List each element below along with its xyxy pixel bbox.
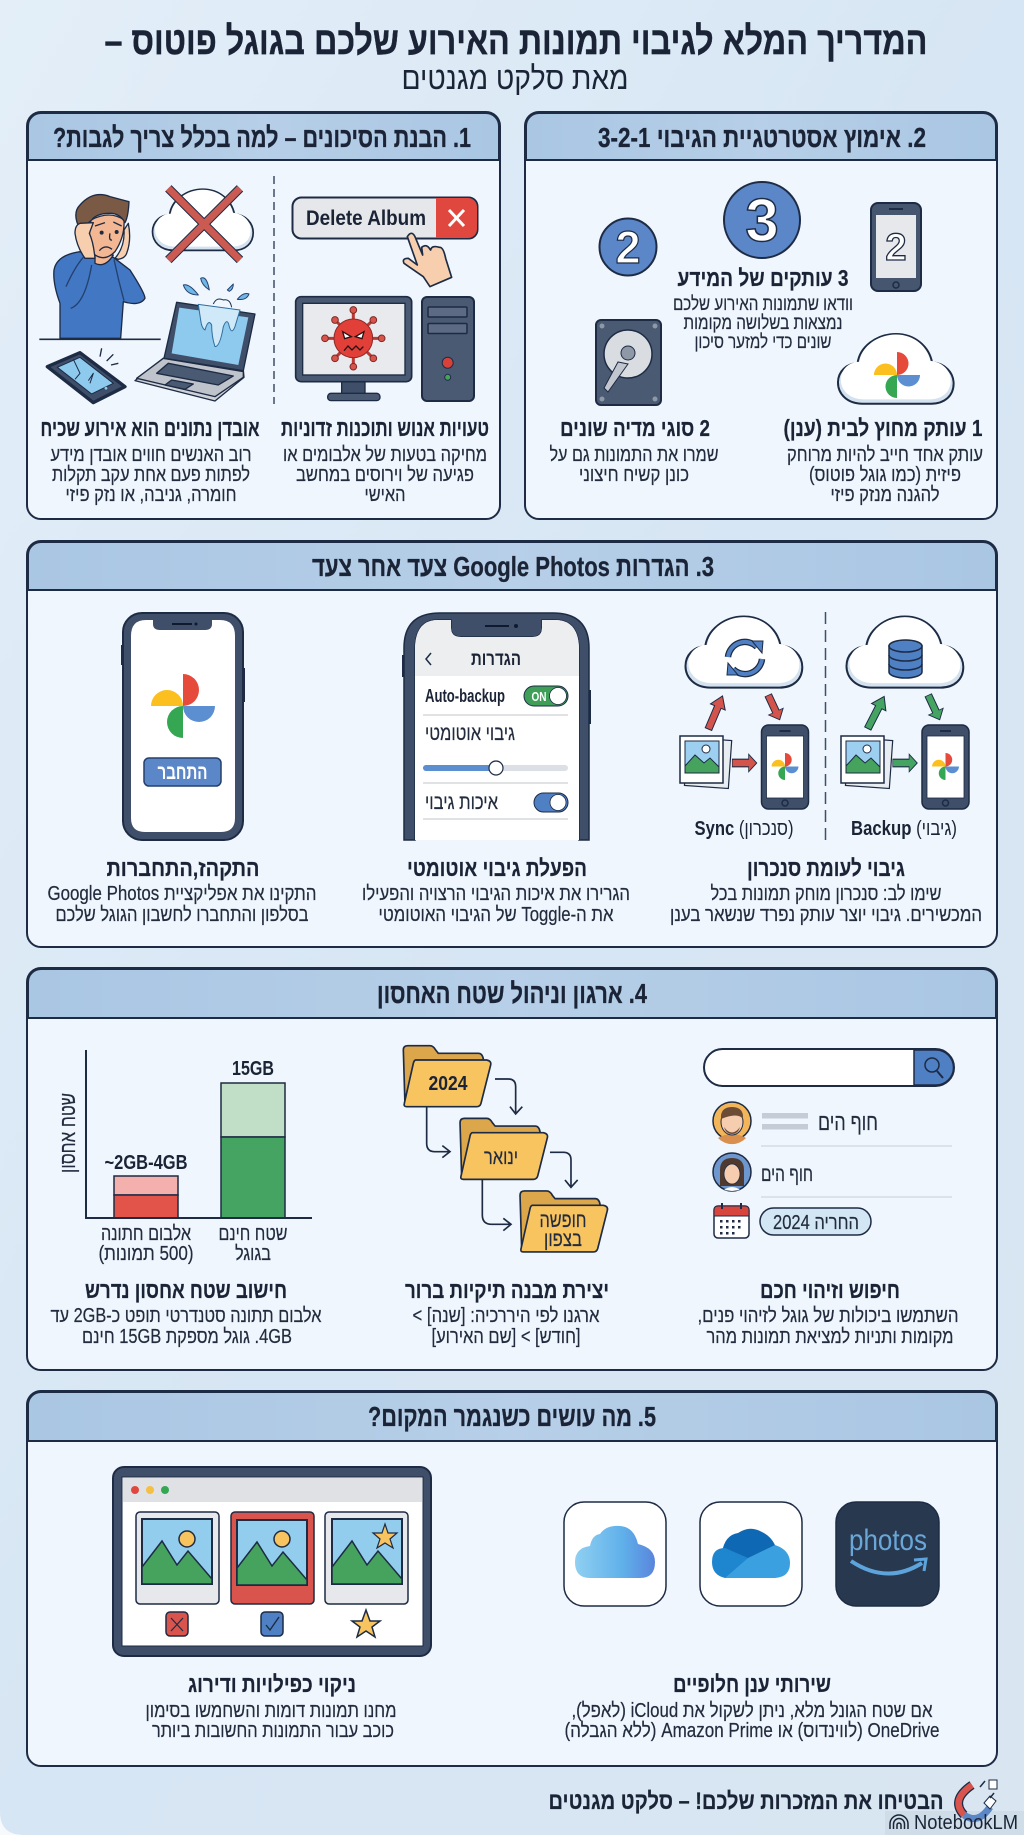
text block: folders: [חודש] > [שם האירוע] — [432, 1326, 580, 1348]
panel header band — [28, 542, 996, 590]
icon: hard drive — [596, 320, 661, 405]
icon: reject box — [166, 1612, 188, 1636]
text block: alternatives: אם שטח הגונל מלא, ניתן לשקול את iCloud (לאפל), — [572, 1700, 933, 1722]
panel header band — [526, 113, 996, 160]
text block: install: בסלפון והתחברו לחשבון הגוגל שלכם — [56, 904, 309, 926]
icon: icloud — [564, 1502, 666, 1606]
icon: pointing hand — [403, 233, 452, 287]
text block: cleanup: כוכב עבור התמונות החשובות ביותר — [152, 1720, 394, 1742]
bar: free tier — [221, 1083, 285, 1218]
icon: onedrive — [700, 1502, 802, 1606]
footer tagline: הבטיחו את המזכרות שלכם! – סלקט מגנטים — [548, 1788, 944, 1815]
heading: 2. אימוץ אסטרטגיית הגיבוי 3-2-1 — [598, 122, 926, 153]
text block: backup vs sync — [670, 855, 982, 926]
icon: wet laptop — [135, 278, 255, 401]
panel header band — [28, 969, 996, 1018]
axis label: free space: בגוגל — [235, 1243, 271, 1265]
text block: storage calc: חישוב שטח אחסון נדרש — [85, 1277, 287, 1303]
icon: backup cloud — [846, 617, 963, 688]
axis label: free space: שטח חינם — [218, 1223, 288, 1245]
text block: auto backup: הגרירו את איכות הגיבוי הרצויה והפעילו — [362, 883, 630, 905]
text block: 2 media: שמרו את התמונות גם על — [550, 444, 718, 466]
search result: woman — [713, 1153, 813, 1191]
search result: man — [713, 1102, 878, 1144]
axis label: wedding album — [98, 1223, 194, 1265]
panel card — [525, 112, 997, 519]
axis label: wedding album: אלבום חתונה — [101, 1223, 191, 1245]
text block: 2 media — [550, 415, 718, 486]
search result: man: חוף הים — [818, 1109, 878, 1135]
tag: wedding 2024: החריה 2024 — [773, 1212, 859, 1234]
text block: 1 offsite: פיזית (כמו גוגל פוטוס) — [809, 464, 961, 486]
panel: 3-2-1 strategy — [525, 112, 997, 519]
text block: backup vs sync: שימו לב: סנכרון מוחק תמונות בכל — [710, 883, 942, 905]
icon: computer tower — [422, 297, 474, 401]
icon: folder january — [460, 1118, 548, 1179]
subtitle: מאת סלקט מגנטים — [402, 60, 628, 96]
text block: smart search: חיפוש וזיהוי חכם — [760, 1277, 900, 1303]
arrows: folder hierarchy — [427, 1079, 578, 1231]
icon: amazon photos: photos — [849, 1524, 927, 1557]
text block: storage calc: 4GB. גוגל מספקת 15GB חינם — [82, 1326, 292, 1348]
icon: folder north vacation — [520, 1191, 608, 1252]
icon: amazon photos — [836, 1502, 939, 1606]
panel card — [27, 968, 997, 1370]
text block: alternatives: שירותי ענן חלופיים — [673, 1671, 831, 1697]
heading: 3. הגדרות Google Photos צעד אחר צעד — [312, 551, 714, 582]
icon: check box — [261, 1612, 283, 1636]
icon: broken phone — [47, 348, 125, 403]
icon: crossed out cloud — [153, 188, 253, 260]
icon: number 3 badge — [724, 182, 800, 258]
text block: 1 offsite: 1 עותק מחוץ לבית (ענן) — [784, 415, 983, 441]
heading: 1. הבנת הסיכונים – למה בכלל צריך לגבות? — [53, 122, 471, 153]
arrow: download — [921, 692, 947, 723]
text block: human error: מחיקה בטעות של אלבומים או — [283, 444, 487, 466]
icon: number 2 badge — [600, 218, 656, 276]
icon: calendar — [714, 1203, 749, 1238]
text block: install: התקהז,התחברות — [106, 855, 260, 881]
text block: 3 copies: 3 עותקים של המידע — [678, 265, 848, 291]
text block: data loss: אובדן נתונים הוא אירוע שכיח — [40, 415, 260, 441]
icon: phone copy — [871, 203, 921, 291]
text block: alternatives — [564, 1671, 940, 1742]
arrow: sideways — [732, 754, 757, 772]
icon: login phone — [121, 613, 245, 840]
photo card: selected — [231, 1512, 314, 1604]
text block: 1 offsite: להגנה מנזק פיזי — [830, 484, 940, 506]
label: backup: (גיבוי) Backup — [851, 818, 957, 840]
text block: data loss: חומרה, גניבה, או נזק פיזי — [66, 484, 236, 506]
arrow: sideways — [893, 754, 917, 772]
icon: magnet logo — [959, 1780, 997, 1819]
icon: google photos logo — [151, 674, 215, 738]
axis label: free space — [218, 1223, 288, 1265]
icon: sync devices — [680, 692, 808, 809]
text block: human error — [281, 415, 489, 506]
icon: number 2 badge: 2 — [615, 222, 641, 273]
panel: risks — [27, 112, 500, 519]
label: sync: (סנכרון) Sync — [694, 818, 794, 840]
icon: star — [352, 1610, 380, 1637]
text block: data loss — [40, 415, 260, 506]
illustration: group origin for left column — [39, 188, 255, 403]
icon: folder north vacation: חופשה — [540, 1209, 586, 1232]
icon: settings phone: איכות גיבוי — [425, 791, 498, 814]
text block: cleanup — [146, 1671, 396, 1742]
panel card — [27, 1391, 997, 1766]
text block: folders: ארגנו לפי היררכיה: [שנה] > — [412, 1305, 600, 1327]
panel card — [27, 112, 500, 519]
search bar — [704, 1049, 954, 1086]
text block: auto backup — [362, 855, 630, 926]
text block: 3 copies — [673, 265, 853, 353]
heading: 5. מה עושים כשנגמר המקום? — [368, 1401, 656, 1432]
bar chart: storage — [55, 1050, 312, 1265]
text block: data loss: לפתות פעם אחת עקב תקלות — [52, 464, 250, 486]
text block: 2 media: 2 סוגי מדיה שונים — [560, 415, 710, 441]
icon: folder north vacation: בצפון — [544, 1228, 582, 1251]
icon: sync cloud — [685, 617, 802, 688]
text block: smart search: השתמשו ביכולות של גוגל לזיהוי פנים, — [698, 1305, 958, 1327]
icon: settings phone: גיבוי אוטומטי — [425, 722, 515, 745]
setting: quality slider — [423, 761, 568, 775]
text block: 1 offsite — [784, 415, 983, 506]
text block: folders: יצירת מבנה תיקיות ברור — [405, 1277, 609, 1303]
text block: storage calc: אלבום תתונה סטנדרטי תופט כ-2GB עד — [50, 1305, 322, 1327]
button: connect — [144, 758, 221, 786]
setting: auto backup toggle: Auto-backup — [425, 686, 505, 706]
heading: 4. ארגון וניהול שטח האחסון — [377, 978, 647, 1009]
axis label: wedding album: (500 תמונות) — [98, 1243, 194, 1265]
text block: 3 copies: נמצאות בשלושה מקומות — [684, 313, 842, 334]
value: 2-4GB: ~2GB-4GB — [104, 1152, 188, 1174]
illustration: worried man — [54, 195, 145, 338]
icon: folder 2024: 2024 — [428, 1073, 468, 1095]
axis title: שטח אחסון — [55, 1093, 80, 1173]
arrow: upload — [861, 693, 891, 732]
text block: install: התקינו את אפליקציית Google Photos — [47, 883, 316, 905]
text block: human error: פגיעה של וירוסים במחשב — [296, 464, 474, 486]
text block: folders — [405, 1277, 609, 1348]
panel: organise and storage — [27, 968, 997, 1370]
text block: smart search: מקומות ותניות למציאת תמונות מהר — [706, 1326, 954, 1348]
icon: settings phone: הגדרות — [471, 649, 521, 670]
panel card — [27, 541, 997, 947]
panel: google photos setup — [27, 541, 997, 947]
text block: smart search — [698, 1277, 958, 1348]
text block: data loss: רוב האנשים חווים אובדן מידע — [50, 444, 252, 466]
text block: storage calc — [50, 1277, 322, 1348]
text block: 3 copies: וודאו שתמונות האירוע שלכם — [673, 294, 853, 315]
icon: backup devices — [841, 692, 969, 809]
text block: 3 copies: שונים כדי למזער סיכון — [694, 332, 832, 353]
text block: cleanup: ניקוי כפילויות ודירוג — [188, 1671, 356, 1697]
icon: infected monitor — [296, 297, 412, 401]
text block: auto backup: את ה-Toggle של הגיבוי האוטומטי — [379, 904, 614, 926]
button: connect: התחבר — [158, 761, 208, 784]
title — [104, 20, 928, 96]
photo card: starred — [325, 1512, 408, 1604]
text block: install — [47, 855, 316, 926]
setting: auto backup toggle: ON — [532, 689, 546, 704]
text block: backup vs sync: גיבוי לעומת סנכרון — [747, 855, 905, 881]
search result: woman: חוף הים — [761, 1163, 813, 1186]
icon: folder january: ינואר — [484, 1146, 518, 1169]
text block: alternatives: OneDrive (לווינדוס) או Amazon Prime (ללא הגבלה) — [564, 1720, 940, 1742]
arrow: upload — [701, 693, 730, 732]
panel: what to do when full — [27, 1391, 997, 1766]
panel header band — [28, 1392, 996, 1441]
arrow: download — [761, 692, 787, 723]
text block: human error: האישי — [364, 484, 406, 506]
icon: delete album button — [292, 198, 478, 238]
icon: phone copy: 2 — [885, 227, 907, 269]
icon: number 3 badge: 3 — [745, 187, 779, 254]
icon: delete album button: Delete Album — [306, 207, 426, 230]
icon: google photos cloud — [838, 334, 954, 404]
text block: auto backup: הפעלת גיבוי אוטומטי — [407, 855, 587, 881]
icon: virus — [322, 307, 385, 370]
text block: cleanup: מחנו תמונות דומות והשחמשו בסימון — [146, 1700, 396, 1722]
text block: 2 media: כונן קשיח חיצוני — [579, 464, 689, 486]
setting: quality toggle — [534, 793, 568, 812]
value: 15GB: 15GB — [232, 1058, 274, 1080]
bar: wedding album — [114, 1176, 178, 1218]
icon: settings phone — [402, 613, 591, 840]
panel header band — [28, 113, 499, 160]
icon: folder 2024 — [403, 1046, 491, 1107]
text block: 1 offsite: עותק אחד חייב להיות מרוחק — [787, 444, 983, 466]
text block: human error: טעויות אנוש ותוכנות זדוניות — [281, 415, 489, 441]
photo card: rejected — [136, 1512, 219, 1604]
illustration: app window — [113, 1467, 431, 1656]
